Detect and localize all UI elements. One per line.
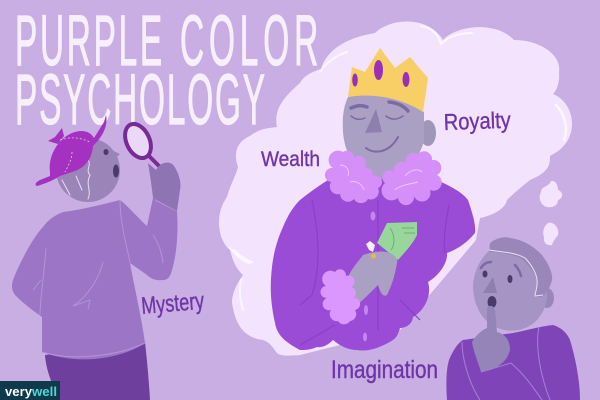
boy ear (540, 288, 554, 308)
buttons (363, 212, 376, 342)
title: PSYCHOLOGY (15, 60, 265, 139)
money (377, 222, 417, 260)
coat seams (300, 200, 449, 345)
face details (351, 102, 408, 152)
boy sweater lines (462, 327, 550, 400)
hair strokes (62, 160, 90, 199)
boy hair highlight (489, 250, 543, 296)
verywell logo: very (5, 384, 33, 399)
boy face details (481, 262, 521, 308)
label: Royalty: Royalty (443, 107, 512, 135)
boy hand (472, 306, 510, 372)
cuff fur (320, 269, 360, 324)
thinking boy (446, 237, 580, 400)
head (56, 138, 120, 202)
detective hat (36, 115, 106, 186)
coat (271, 178, 475, 351)
title: PURPLE (15, 1, 162, 80)
ear (420, 120, 436, 146)
detective figure (12, 115, 181, 400)
thought cloud (219, 21, 572, 356)
hat stitches (60, 138, 90, 172)
detective hand (148, 163, 181, 211)
title: COLOR (180, 1, 318, 80)
magnifying glass (120, 120, 160, 167)
label: Mystery: Mystery (140, 288, 205, 320)
head (343, 95, 424, 181)
hand with ring (348, 241, 397, 307)
fur curls (340, 165, 422, 190)
king figure (271, 48, 475, 351)
label: Wealth: Wealth (261, 148, 320, 171)
sweater lines (33, 200, 177, 357)
boy head (473, 244, 547, 331)
title (15, 1, 318, 139)
verywell logo (0, 381, 60, 400)
small thought puffs (540, 181, 562, 245)
sweater (12, 198, 177, 359)
label: Imagination: Imagination (331, 356, 438, 384)
verywell logo: well (31, 384, 57, 399)
nose (365, 109, 382, 133)
boy sweater (446, 325, 580, 400)
boy hair (489, 237, 552, 297)
crown (348, 48, 428, 112)
pants (45, 342, 150, 400)
fur collar (325, 151, 442, 205)
nose and mouth (103, 146, 120, 178)
